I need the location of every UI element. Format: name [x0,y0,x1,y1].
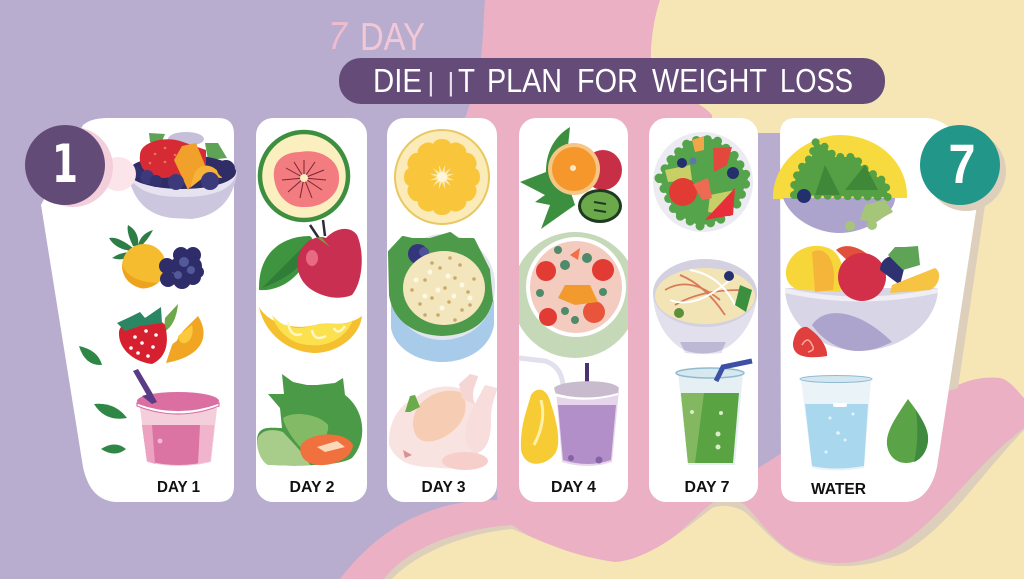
label: day 7: DAY 7 [684,479,730,496]
icon: pink smoothie cup [133,369,219,466]
icon: red apple and leaf [259,220,362,298]
icon: water glass [800,376,872,470]
card 3: day 3 [387,118,497,502]
label: day 3: DAY 3 [422,479,466,496]
icon: fruit bowl [785,246,939,351]
title: 7 DAY [328,15,425,59]
icon: oats bowl on greens [390,234,495,362]
icon: strawberry and orange slice [117,304,204,364]
card 6: water [773,118,977,502]
title banner: T [458,62,475,99]
icon: falling leaves [79,346,127,454]
title banner: FOR [577,62,638,99]
card 5: day 7 [649,118,758,502]
card background [780,118,977,502]
icon: leafy greens and tomato [257,374,362,465]
icon: noodle bowl [653,259,757,354]
icon: lemon wedge [259,307,362,353]
title: 7 DAY: 7 [328,15,348,58]
icon: green salad in yellow bowl [773,135,907,233]
title banner: WEIGHT [652,62,767,99]
label: day 4: DAY 4 [551,479,596,496]
badge: number 1 [25,125,136,207]
label: water: WATER [811,481,866,498]
icon: fig slice [260,132,348,220]
icon: green drop [887,399,928,463]
title banner: | [448,67,454,97]
icon: purple smoothie with straw [519,358,619,466]
icon: lemon and grapes [109,225,204,289]
title banner: | [428,67,434,97]
card background [519,118,628,502]
card background [649,118,758,502]
icon: orange, greens and cucumber [520,127,622,229]
label: day 2: DAY 2 [290,479,334,496]
icon: salad plate [653,132,753,232]
badge: number 1: 1 [52,134,78,195]
icon: green juice glass [676,361,752,465]
title banner: LOSS [780,62,853,99]
icon: vegetable soup bowl [519,232,628,358]
badge: number 7: 7 [948,132,976,195]
card 2: day 2 [256,118,367,502]
title: 7 DAY: DAY [360,16,425,59]
icon: fruit and berry bowl [128,132,237,219]
icon: raw chicken [389,374,497,470]
icon: strawberry slice [793,327,827,357]
title banner: DIE [373,62,422,99]
title banner: PLAN [487,62,562,99]
card 1: day 1 [41,118,237,502]
card background [41,118,234,502]
label: day 1: DAY 1 [157,479,200,496]
card background [387,118,497,502]
icon: orange slice [395,130,489,224]
title banner [339,58,885,104]
card background [256,118,367,502]
badge: number 7 [920,125,1006,211]
card 4: day 4 [518,118,628,502]
